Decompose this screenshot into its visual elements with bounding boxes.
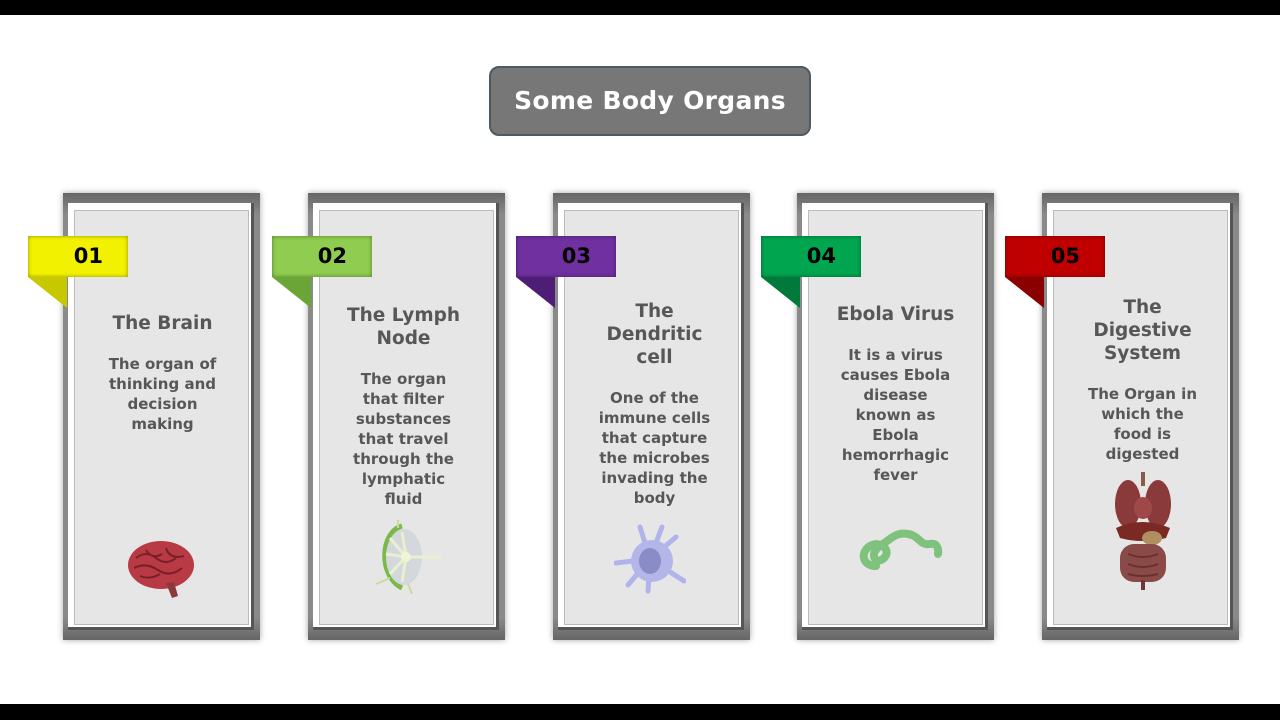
text: digestive: Digestive <box>1093 320 1192 341</box>
text: lymph node: The Lymph <box>347 305 460 326</box>
fold 04 <box>761 277 800 308</box>
text: lymph node: Node <box>376 328 430 349</box>
panel: card 1 brain <box>63 193 260 640</box>
text: ebola: fever <box>873 466 918 484</box>
tab 04 <box>761 236 861 277</box>
text: dendritic cell: The <box>635 301 674 322</box>
fold 02 <box>272 277 311 308</box>
text: ebola: hemorrhagic <box>842 446 949 464</box>
icon: brain <box>128 541 194 598</box>
panel: card 4 ebola <box>797 193 994 640</box>
text: brain: decision <box>128 395 198 413</box>
text: lymph node: that filter <box>363 390 444 408</box>
text: lymph node: substances <box>356 410 451 428</box>
text: ebola: It is a virus <box>848 346 943 364</box>
text: dendritic cell: immune cells <box>599 409 710 427</box>
text: digestive: which the <box>1101 405 1184 423</box>
fold 05 <box>1005 277 1044 308</box>
text: dendritic cell: the microbes <box>599 449 710 467</box>
text: ebola: Ebola <box>872 426 919 444</box>
text: dendritic cell: invading the <box>601 469 708 487</box>
text: dendritic cell: cell <box>636 347 673 368</box>
text: lymph node: fluid <box>385 490 422 508</box>
icon: digestive system <box>1115 472 1171 590</box>
icon: ebola virus <box>860 530 942 570</box>
text: digestive <box>1088 297 1197 463</box>
text: lymph node: that travel <box>358 430 449 448</box>
text: digestive: digested <box>1106 445 1179 463</box>
text: dendritic cell <box>599 301 710 507</box>
text: dendritic cell: that capture <box>602 429 707 447</box>
text: brain: thinking and <box>109 375 216 393</box>
icon: lymph node <box>376 520 442 594</box>
text: dendritic cell: body <box>634 489 675 507</box>
text: digestive: System <box>1104 343 1181 364</box>
title: Some Body Organs <box>514 86 786 115</box>
panel: card 5 digestive system <box>1042 193 1239 640</box>
panel: card 3 dendritic cell <box>553 193 750 640</box>
title <box>489 66 811 136</box>
icon: dendritic cell <box>614 524 686 594</box>
panel: card 2 lymph node <box>308 193 505 640</box>
tab 01 <box>28 236 128 277</box>
text: lymph node: through the <box>353 450 454 468</box>
text: brain: The Brain <box>112 313 212 334</box>
text: brain: making <box>131 415 194 433</box>
text: brain <box>108 313 216 433</box>
text: ebola: Ebola Virus <box>837 304 954 325</box>
text: lymph node <box>347 305 460 508</box>
tab 05: 05 <box>1051 244 1080 268</box>
text: brain: The organ of <box>109 355 216 373</box>
text: dendritic cell: Dendritic <box>607 324 702 345</box>
tab 02: 02 <box>318 244 347 268</box>
text: dendritic cell: One of the <box>610 389 699 407</box>
tab 05 <box>1005 236 1105 277</box>
text: digestive: The <box>1123 297 1162 318</box>
fold 01 <box>28 277 67 308</box>
tab 04: 04 <box>807 244 836 268</box>
text: digestive: The Organ in <box>1088 385 1197 403</box>
text: ebola <box>837 304 954 484</box>
tab 02 <box>272 236 372 277</box>
text: lymph node: The organ <box>361 370 446 388</box>
tab 03 <box>516 236 616 277</box>
text: ebola: disease <box>863 386 928 404</box>
tab 01: 01 <box>74 244 103 268</box>
text: ebola: known as <box>856 406 935 424</box>
tab 03: 03 <box>562 244 591 268</box>
fold 03 <box>516 277 555 308</box>
text: digestive: food is <box>1114 425 1171 443</box>
text: lymph node: lymphatic <box>362 470 445 488</box>
text: ebola: causes Ebola <box>841 366 950 384</box>
